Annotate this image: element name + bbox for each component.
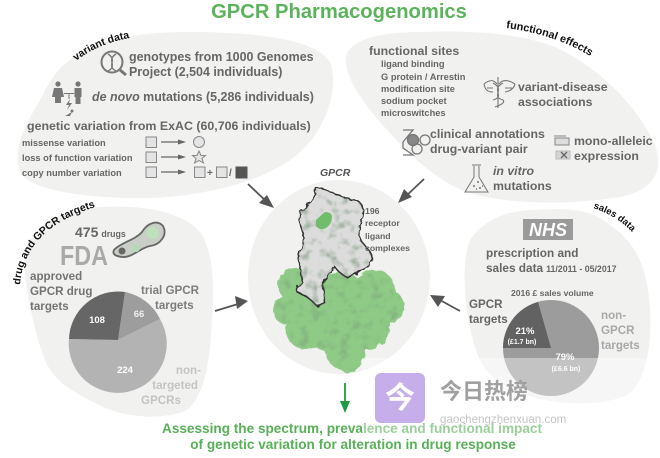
text: genotypes: Project (2,504 individuals) bbox=[129, 65, 282, 79]
text: 475 drugs: 475 bbox=[75, 224, 99, 240]
arrow: targets to GPCR bbox=[215, 296, 248, 311]
panel: variant data bbox=[18, 32, 333, 198]
text: sales volume: 2016 £ sales volume bbox=[511, 288, 594, 298]
conclusion text: Assessing the spectrum, prevalence and functional impact bbox=[162, 421, 542, 436]
icon: watermark badge bbox=[375, 373, 425, 423]
text: site list: sodium pocket bbox=[381, 96, 447, 106]
text: 475 drugs: drugs bbox=[101, 229, 126, 239]
text: variant-disease: variant-disease bbox=[518, 80, 608, 94]
text: approved GPCR drug targets: targets bbox=[30, 300, 69, 313]
icon: drug molecule bbox=[113, 223, 165, 257]
panel: sales data bbox=[464, 204, 650, 403]
pie chart: targets: 224 bbox=[117, 365, 134, 376]
text: prescription and sales data: prescription and bbox=[486, 246, 578, 260]
text: GPCR targets: GPCR bbox=[469, 298, 503, 311]
watermark overlay bbox=[362, 358, 660, 437]
icon: watermark badge: 今 bbox=[385, 373, 415, 417]
icon: allelic expression bbox=[554, 136, 570, 159]
panel: drug and GPCR targets bbox=[12, 202, 213, 416]
heading: sales data: sales data bbox=[594, 204, 634, 232]
icon: drug-variant molecule bbox=[403, 130, 430, 155]
text: trial GPCR targets: trial GPCR bbox=[141, 284, 200, 297]
text: GPCR targets: targets bbox=[469, 313, 508, 326]
icon: flask bbox=[465, 165, 488, 192]
heading: drug and GPCR targets: drug and GPCR targets bbox=[12, 202, 94, 284]
text: site list: modification site bbox=[381, 84, 455, 94]
panel: GPCR structure bbox=[248, 167, 430, 376]
text: mono-allelic: mono-alleleic bbox=[574, 134, 653, 148]
text: non-GPCR targets: targets bbox=[601, 339, 640, 352]
text: non-targeted GPCRs: GPCRs bbox=[141, 394, 181, 407]
pie chart: targets bbox=[69, 291, 167, 393]
icon: variation legend: + bbox=[207, 168, 213, 179]
text: variation types: missense variation bbox=[22, 138, 106, 148]
heading: functional effects: functional effects bbox=[506, 20, 592, 56]
text: clinical annotations: drug-variant pair bbox=[430, 142, 528, 156]
text: 196 complexes: receptor bbox=[365, 218, 400, 228]
icon: variation legend bbox=[146, 136, 247, 179]
protein: grey receptor bbox=[296, 186, 374, 308]
protein: green G protein bbox=[273, 268, 405, 374]
panel: functional effects bbox=[346, 20, 658, 202]
text: trial GPCR targets: targets bbox=[155, 299, 194, 312]
text: non-GPCR targets: non- bbox=[601, 309, 626, 322]
title: GPCR Pharmacogenomics bbox=[211, 1, 467, 23]
text: non-targeted GPCRs: non- bbox=[176, 364, 201, 377]
text: variation types: loss of function variation bbox=[22, 153, 133, 163]
icon: magnifier with DNA bbox=[102, 52, 126, 75]
text: variant-disease: associations bbox=[518, 95, 593, 109]
text: non-targeted GPCRs: targeted bbox=[152, 379, 198, 392]
pie chart: targets: 66 bbox=[134, 309, 144, 320]
text: non-GPCR targets: GPCR bbox=[601, 324, 635, 337]
text: site list: ligand binding bbox=[381, 59, 445, 69]
icon: FDA logo: FDA bbox=[60, 240, 108, 271]
text: functional sites: functional sites bbox=[369, 44, 459, 58]
text: in vitro: in vitro bbox=[493, 164, 534, 178]
text: prescription and sales data: 11/2011 - 05/2017 bbox=[546, 264, 617, 274]
text: de novo: de novo mutations (5,286 individuals) bbox=[92, 90, 314, 104]
pie chart: sales: (£1.7 bn) bbox=[508, 339, 536, 346]
icon: NHS logo: NHS bbox=[529, 220, 567, 240]
text: watermark name: 今日热榜 bbox=[440, 374, 528, 406]
icon: family bbox=[52, 81, 82, 116]
label: GPCR: GPCR bbox=[320, 167, 351, 179]
text: 196 complexes: complexes bbox=[365, 243, 410, 253]
heading: variant data: variant data bbox=[72, 32, 130, 60]
arrow: sales to GPCR bbox=[430, 295, 460, 311]
arrow: green output bbox=[340, 383, 350, 413]
text: mono-allelic: expression bbox=[574, 149, 639, 163]
text: 196 complexes: ligand bbox=[365, 231, 391, 241]
text: clinical annotations: clinical annotations bbox=[430, 127, 545, 141]
text: variation types: copy number variation bbox=[22, 168, 122, 178]
icon: variation legend: / bbox=[229, 168, 232, 179]
arrow: variant data to GPCR bbox=[248, 184, 274, 208]
text: 196 complexes: 196 bbox=[365, 206, 380, 216]
text: genotypes: genotypes from 1000 Genomes bbox=[129, 50, 314, 64]
text: approved GPCR drug targets: approved bbox=[30, 270, 82, 283]
text: prescription and sales data: sales data bbox=[486, 261, 543, 275]
arrow: functional effects to GPCR bbox=[398, 179, 424, 203]
pie chart: sales: 21% bbox=[515, 326, 535, 337]
text: watermark url: gaochengzhenxuan.com bbox=[440, 413, 566, 426]
text: site list: microswitches bbox=[381, 108, 446, 118]
pie chart: sales bbox=[503, 300, 599, 396]
pie chart: sales: 79% bbox=[555, 352, 575, 363]
pie chart: sales: (£6.6 bn) bbox=[552, 366, 580, 373]
pie chart: targets: 108 bbox=[89, 315, 105, 326]
icon: caduceus bbox=[484, 77, 515, 108]
text: ExAC: genetic variation from ExAC (60,706 individuals) bbox=[27, 119, 311, 133]
text: approved GPCR drug targets: GPCR drug bbox=[30, 285, 92, 298]
conclusion text: of genetic variation for alteration in drug response bbox=[190, 437, 516, 452]
text: in vitro: mutations bbox=[493, 179, 552, 193]
text: site list: G protein / Arrestin bbox=[381, 72, 466, 82]
